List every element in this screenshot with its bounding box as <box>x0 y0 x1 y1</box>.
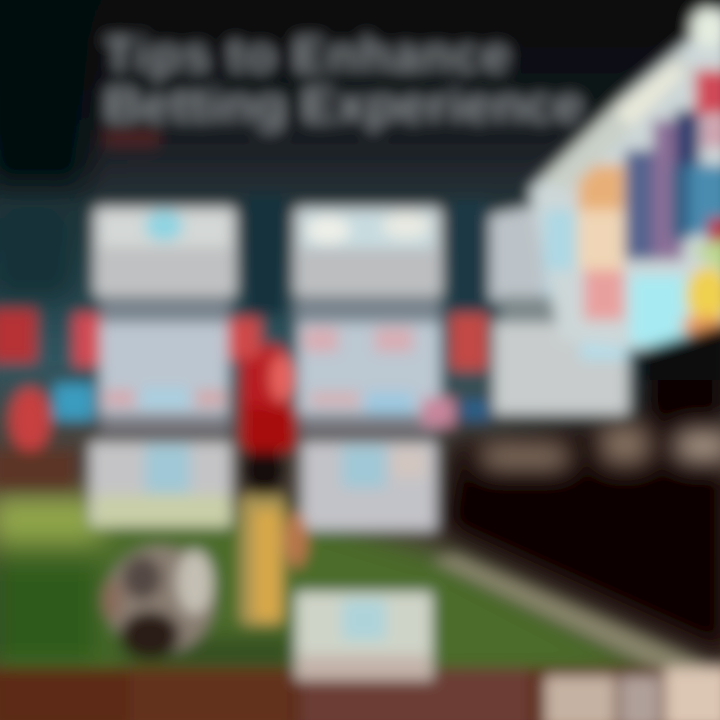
wooden table foreground <box>0 668 720 720</box>
player: shorts <box>242 444 286 496</box>
subtitle accent <box>104 130 159 146</box>
panel: middle centre card <box>298 322 454 426</box>
title: Tips to Enhance <box>104 27 512 83</box>
colourful banners top right <box>530 5 720 350</box>
panel: top left card <box>94 207 236 297</box>
title <box>104 27 584 133</box>
red side flags <box>0 310 490 490</box>
panel: top middle card <box>294 207 442 297</box>
crowd: right dark area <box>440 320 720 660</box>
panel divider bands <box>100 300 440 433</box>
player: legs <box>240 495 308 625</box>
touchline <box>430 555 720 680</box>
panel: middle left card <box>100 322 228 414</box>
football <box>102 546 214 659</box>
title: Betting Experience <box>104 77 584 133</box>
panel: bottom centre card <box>302 442 436 530</box>
panel: middle right card <box>494 296 628 414</box>
player: red shirt <box>234 318 296 451</box>
player <box>234 318 308 625</box>
crowd: faces <box>480 425 720 469</box>
bottom foreground card <box>296 592 432 680</box>
grass pitch <box>0 495 680 690</box>
panel: bottom left card <box>90 442 231 527</box>
white diagonal roof light <box>540 8 720 380</box>
panel: top right card <box>490 205 575 305</box>
